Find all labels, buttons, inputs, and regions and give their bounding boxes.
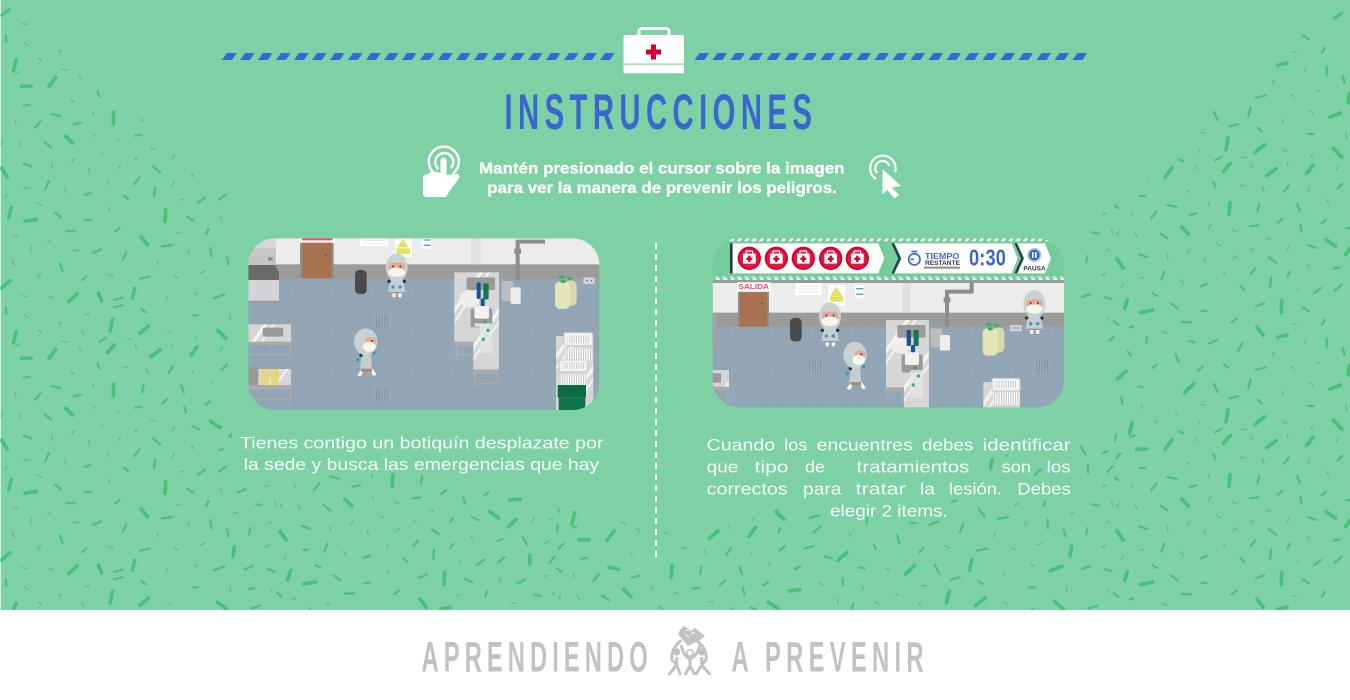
HUD: pause: PAUSA: [1023, 265, 1046, 272]
text block: right description: debes: [922, 436, 973, 455]
instruction text: [479, 160, 844, 197]
text block: left description: [240, 433, 604, 474]
panel: game scene left: [248, 238, 599, 411]
panel: game scene right: [713, 238, 1064, 409]
door: SALIDA: [738, 284, 769, 291]
center table: [454, 272, 499, 387]
footer white band: [0, 610, 1350, 700]
text block: right description: los: [1047, 458, 1071, 477]
wall posters: [360, 238, 432, 257]
text block: right description: tratamientos: [857, 458, 969, 477]
worker front: [386, 253, 408, 297]
floor: [713, 327, 1064, 408]
floor vents: [809, 360, 1048, 374]
text block: right description: tipo: [755, 458, 788, 477]
center table: [886, 320, 929, 408]
text block: right description: la: [920, 480, 936, 499]
trash can: [790, 318, 802, 341]
divider stripes: [222, 52, 1090, 60]
text block: right description: que: [707, 458, 738, 477]
worker front: [819, 302, 841, 346]
text block: right description: Debes: [1017, 480, 1071, 499]
instruction text: para ver la manera de prevenir los peligros.: [487, 180, 837, 197]
wall: [248, 238, 599, 265]
pipe: [518, 242, 545, 280]
text block: right description: correctos: [707, 480, 788, 499]
worker walking: [354, 328, 377, 377]
icon: touch hand: [423, 147, 459, 197]
door: [737, 282, 771, 327]
buckets: [931, 325, 1022, 351]
worker back right: [1023, 290, 1045, 334]
wall posters: [796, 283, 864, 306]
text block: right description: [707, 436, 1071, 521]
text block: right description: para: [803, 480, 842, 499]
trash can: [355, 270, 367, 294]
worker walking: [843, 342, 867, 390]
instruction text: Mantén presionado el cursor sobre la imagen: [479, 160, 844, 178]
machine: [713, 313, 717, 349]
water bottles: [555, 276, 577, 309]
wall: [713, 280, 1064, 313]
text block: right description: identificar: [983, 436, 1071, 455]
HUD: timer: [893, 243, 1018, 273]
text block: right description: Cuando: [707, 436, 775, 455]
text block: left description: Tienes contigo un botiquín desplazate por: [240, 433, 604, 452]
HUD: pause: [1016, 243, 1051, 273]
text block: right description: de: [805, 458, 825, 477]
shelf baskets: [983, 378, 1020, 409]
title: INSTRUCCIONES: [504, 84, 812, 140]
HUD: timer: RESTANTE: [925, 260, 960, 267]
text block: right description: lesión.: [949, 480, 1002, 499]
left table: [713, 370, 729, 403]
text block: right description: los: [784, 436, 807, 455]
HUD stripes: [727, 238, 1052, 241]
text block: right description: encuentres: [817, 436, 913, 455]
HUD: lives: [730, 243, 884, 273]
icon: cursor click: [870, 156, 901, 198]
floor vents: [376, 314, 388, 402]
left tables: [248, 324, 291, 403]
door: [299, 238, 335, 278]
text block: right description: elegir 2 items.: [830, 502, 948, 521]
footer: brand right: A PREVENIR: [732, 634, 924, 681]
machine: [248, 238, 279, 302]
water bottles: [983, 323, 1004, 356]
dashed divider: [655, 243, 657, 559]
HUD background: [713, 238, 1064, 280]
text block: left description: la sede y busca las emergencias que hay: [244, 455, 600, 474]
footer: brand left: APRENDIENDO: [422, 634, 648, 681]
buckets: [502, 277, 595, 304]
HUD: timer: 0:30: [969, 245, 1006, 271]
text block: right description: tratar: [856, 480, 906, 499]
text block: right description: son: [1002, 458, 1031, 477]
floor: [248, 278, 599, 410]
icon: footer logo: [668, 626, 710, 675]
icon: first aid kit: [624, 28, 684, 73]
HUD: timer: TIEMPO: [925, 252, 959, 261]
pipe: [947, 282, 972, 327]
right shelves: [556, 333, 593, 411]
